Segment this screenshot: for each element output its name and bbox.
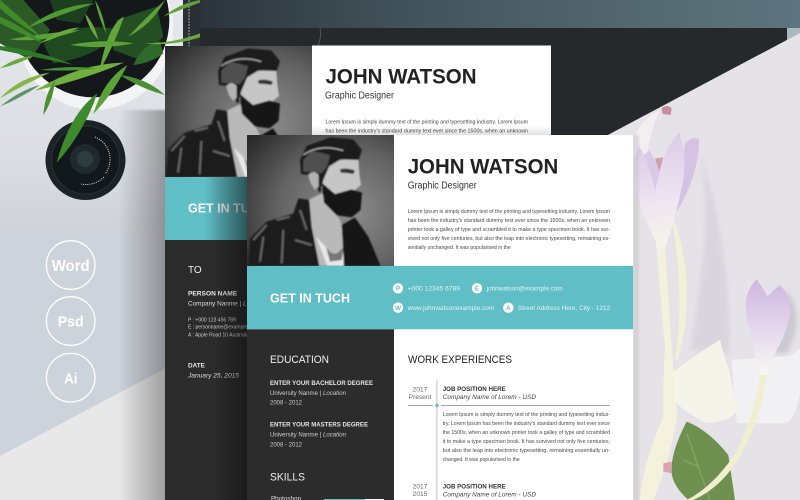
background: tablet and lower left surface xyxy=(0,110,178,500)
contact heading: GET IN TUCH xyxy=(270,292,350,306)
job entry 1: Lorem Ipsum is simply dummy text of the printing and typesetting indus- xyxy=(443,412,610,418)
education entry 2: ENTER YOUR MASTERS DEGREE xyxy=(270,422,368,429)
background: dark folder xyxy=(183,0,800,135)
contact: email xyxy=(472,283,563,293)
front resume page xyxy=(247,135,633,500)
back resume header panel xyxy=(312,46,551,136)
education entry 1: ENTER YOUR BACHELOR DEGREE xyxy=(270,380,373,387)
back resume sidebar xyxy=(165,177,247,500)
back resume sidebar: TO xyxy=(188,265,202,276)
name heading: JOHN WATSON xyxy=(408,155,558,178)
contact: email: johnwatson@example.com xyxy=(486,286,563,293)
education heading: EDUCATION xyxy=(270,354,329,366)
contact: website: www.johnwatsonexample.com xyxy=(407,305,495,312)
job entry 1: try. Lorem Ipsum has been the industry's standard dummy text ever since xyxy=(443,421,610,427)
intro paragraph: vived not only five centuries, but also the leap into electronic typesetting, remaining es- xyxy=(408,236,610,242)
front resume shadow xyxy=(633,135,639,500)
intro paragraph: sentially unchanged. It was popularised in the xyxy=(408,245,511,251)
job entry 2 xyxy=(413,483,536,498)
badge: Word xyxy=(46,241,95,289)
job entry 1: but also the leap into electronic typesetting, remaining essentially un- xyxy=(443,448,610,454)
back resume sidebar: PERSON NAME xyxy=(188,291,238,298)
job entry 1: the 1500s, when an unknown printer took a galley of type and scrambled xyxy=(443,430,610,436)
back resume sidebar: January 25, 2015 xyxy=(187,372,239,379)
icon: camera lens xyxy=(46,120,126,200)
panel: front resume xyxy=(247,135,633,500)
back resume header panel: Lorem Ipsum is simply dummy text of the printing and typesetting industry. Lorem Ipsum xyxy=(326,119,528,125)
timeline xyxy=(408,380,610,500)
contact: address: A xyxy=(506,305,511,312)
job entry 1: JOB POSITION HERE xyxy=(443,386,506,393)
back resume sidebar: E : personname@example.com xyxy=(188,325,258,331)
format badges xyxy=(46,241,95,402)
contact: address: Street Address Here, City - 1212 xyxy=(518,305,610,312)
job entry 2: JOB POSITION HERE xyxy=(443,483,506,490)
job title: Graphic Designer xyxy=(408,180,477,192)
illustration: potted plant xyxy=(0,0,200,163)
education entry 1 xyxy=(270,380,373,407)
contact: website xyxy=(393,302,495,313)
contact: phone xyxy=(393,283,460,293)
sidebar: education and skills xyxy=(247,329,394,500)
badge: Word: Word xyxy=(52,258,90,275)
education entry 2: 2008 - 2012 xyxy=(270,441,302,448)
back resume header panel: has been the industry's standard dummy text ever since the 1500s, when an unknown xyxy=(326,128,528,134)
back resume sidebar: P : +000 123 456 789 xyxy=(188,317,236,323)
contact: phone: +000 12345 6789 xyxy=(408,286,460,293)
back resume header panel: JOHN WATSON xyxy=(326,66,476,89)
skill bar: Photoshop xyxy=(271,496,384,500)
intro paragraph xyxy=(408,209,610,251)
panel: back resume xyxy=(165,46,551,500)
job entry 1: changed. It was popularised in the xyxy=(443,457,520,463)
badge: Psd: Psd xyxy=(58,314,84,330)
education entry 1: University Nanme | Location xyxy=(270,390,346,397)
job entry 2: 2015 xyxy=(413,491,428,498)
contact: phone: P xyxy=(396,286,400,293)
badge: Psd xyxy=(46,297,95,345)
skills heading: SKILLS xyxy=(270,471,305,483)
back resume photo xyxy=(165,46,312,177)
education entry 2: University Nanme | Location xyxy=(270,431,346,438)
intro paragraph: printer took a galley of type and scrambled it to make a type specimen book. It has sur- xyxy=(408,227,610,233)
job entry 1: 2017 xyxy=(413,386,428,393)
education entry 1: 2008 - 2012 xyxy=(270,400,302,407)
back resume header panel: Graphic Designer xyxy=(325,90,395,102)
intro paragraph: Lorem Ipsum is simply dummy text of the printing and typesetting industry. Lorem Ipsum xyxy=(408,209,610,215)
back resume sidebar: DATE xyxy=(188,362,206,369)
badge: Ai xyxy=(46,353,95,402)
job entry 1: it to make a type specimen book. It has survived not only five centuries, xyxy=(443,439,610,445)
education entry 2 xyxy=(270,422,368,448)
contact: address xyxy=(503,302,610,313)
job entry 1: Present xyxy=(409,394,432,401)
job entry 2: Company Name of Lorem - USD xyxy=(443,491,536,498)
back resume sidebar: Company Nanme | Location xyxy=(188,300,268,307)
job entry 1: Company Name of Lorem - USD xyxy=(443,394,536,401)
intro paragraph: has been the industry's standard dummy text ever since the 1500s, when an unknown xyxy=(408,218,610,224)
contact: website: W xyxy=(395,305,401,312)
badge: Ai: Ai xyxy=(64,371,77,387)
work experience heading: WORK EXPERIENCES xyxy=(408,354,512,366)
contact: email: E xyxy=(475,286,479,293)
back resume sidebar: A : Apple Road 10 Australia xyxy=(188,333,249,339)
portrait photo xyxy=(247,135,394,266)
illustration: flowers xyxy=(633,106,800,500)
contact band xyxy=(247,266,633,329)
back resume sidebar: GET IN TUCH xyxy=(188,202,268,216)
job entry 1 xyxy=(409,386,610,463)
job entry 2: 2017 xyxy=(413,483,428,490)
